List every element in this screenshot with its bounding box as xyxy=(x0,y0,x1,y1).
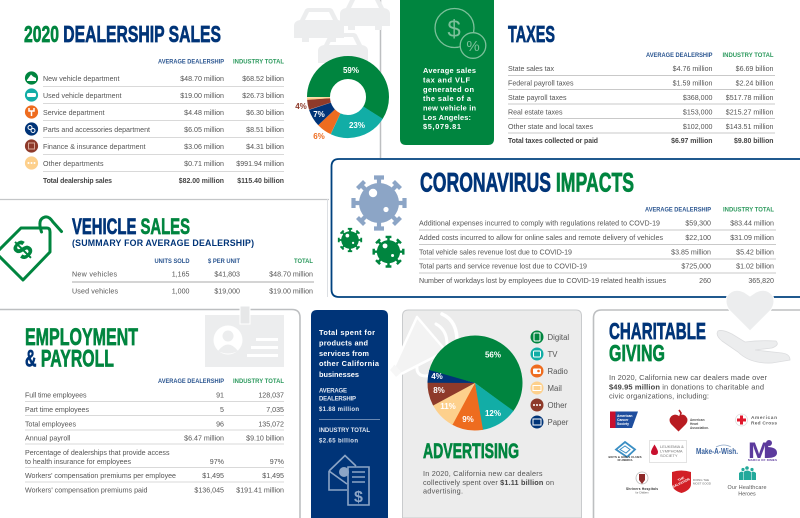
logo: American Cancer Society: American xyxy=(617,414,632,418)
logo: American Red Cross: American xyxy=(751,415,777,421)
logo: Leukemia and Lymphoma Society: SOCIETY xyxy=(660,453,678,458)
table: employment: $9.10 billion xyxy=(246,434,284,442)
table: coronavirus: $725,000 xyxy=(681,262,711,270)
table: taxes: $215.27 million xyxy=(726,108,774,116)
table: employment: 97% xyxy=(210,458,225,466)
table: taxes: Federal payroll taxes xyxy=(508,80,574,88)
table: dealership sales xyxy=(43,58,284,185)
table: employment: Full time employees xyxy=(25,392,87,400)
table: taxes xyxy=(508,52,775,145)
logo: Leukemia and Lymphoma Society: LYMPHOMA xyxy=(660,448,683,454)
table: dealership sales: $8.51 billion xyxy=(246,126,284,134)
logo: Leukemia and Lymphoma Society xyxy=(650,440,686,462)
table: taxes: $102,000 xyxy=(683,123,713,131)
text: spending: $2.65 billion xyxy=(319,438,358,444)
logo: Salvation Army: THE xyxy=(677,476,686,482)
legend: advertising: Radio xyxy=(548,367,569,376)
table: coronavirus: $83.44 million xyxy=(730,220,774,228)
table: coronavirus: Added costs incurred to allow for online sales and remote delivery of vehicles xyxy=(419,234,663,242)
table: employment: $191.41 million xyxy=(236,486,284,494)
table: dealership sales: $68.52 billion xyxy=(242,75,284,83)
subheading: (SUMMARY FOR AVERAGE DEALERSHIP) xyxy=(72,238,254,248)
logo: American Heart Association xyxy=(670,410,709,432)
logo: American Red Cross xyxy=(736,414,777,426)
table: coronavirus: Total vehicle sales revenue lost due to COVID-19 xyxy=(419,248,572,256)
icon: price tag: $ xyxy=(7,234,39,266)
table: employment xyxy=(25,378,285,494)
icon: id badge xyxy=(205,306,284,367)
logo: Boys and Girls Clubs xyxy=(608,442,642,462)
table: vehicle sales xyxy=(72,258,314,296)
table: employment: $1,495 xyxy=(262,472,284,480)
icon: small virus right xyxy=(374,237,403,266)
table: vehicle sales: Used vehicles xyxy=(72,288,118,296)
text: charitable: $49.95 million in donations to charitable and xyxy=(609,382,764,392)
table: employment: Workers' compensation premiums per employee xyxy=(25,472,176,480)
table: dealership sales: $6.05 million xyxy=(184,126,224,134)
text: advertising xyxy=(423,469,554,496)
heading: employment and payroll: EMPLOYMENT xyxy=(25,324,138,351)
text: spending: INDUSTRY TOTAL xyxy=(319,428,370,434)
icon: price tag xyxy=(0,217,62,280)
heading: coronavirus impacts: CORONAVIRUS IMPACTS xyxy=(420,168,634,198)
table: taxes: AVERAGE DEALERSHIP xyxy=(646,52,713,59)
table: taxes: INDUSTRY TOTAL xyxy=(722,52,774,59)
table: taxes: Real estate taxes xyxy=(508,108,563,116)
panel: coronavirus impacts xyxy=(332,159,800,297)
icons: department xyxy=(25,71,38,170)
logo: Leukemia and Lymphoma Society: LEUKEMIA & xyxy=(660,444,684,449)
table: vehicle sales: $ PER UNIT xyxy=(208,258,241,265)
heading: advertising: ADVERTISING xyxy=(423,439,519,463)
text: sales tax: $5,079.81 xyxy=(423,122,461,131)
logo: Boys and Girls Clubs: BOYS & GIRLS CLUBS xyxy=(608,455,642,459)
table: vehicle sales: New vehicles xyxy=(72,270,117,278)
logo: Make-A-Wish: Make-A-Wish. xyxy=(696,447,738,456)
heading: charitable giving: GIVING xyxy=(609,340,665,366)
chart: advertising pie: 9% xyxy=(462,415,474,424)
chart: advertising pie: 8% xyxy=(433,386,445,395)
table: vehicle sales: $19,000 xyxy=(214,288,240,296)
panel: advertising xyxy=(389,310,582,518)
logo: Shriners Hospitals xyxy=(626,472,658,494)
heading: charitable giving: CHARITABLE xyxy=(609,318,706,344)
logo: American Cancer Society: Society xyxy=(617,422,629,426)
heading: employment and payroll: & PAYROLL xyxy=(25,346,114,372)
table: coronavirus: AVERAGE DEALERSHIP xyxy=(645,206,711,214)
chart: sales donut: 23% xyxy=(349,121,365,130)
logo: American Cancer Society xyxy=(610,412,638,428)
chart: sales donut: 59% xyxy=(343,66,359,75)
text: advertising: In 2020, California new car dealers xyxy=(423,469,543,478)
table: dealership sales: New vehicle department xyxy=(43,75,120,83)
table: dealership sales: Service department xyxy=(43,109,105,117)
table: taxes: $517.78 million xyxy=(726,94,774,102)
icon: large virus xyxy=(354,178,404,228)
text: sales tax: new vehicle in xyxy=(423,104,476,112)
table: employment: 135,072 xyxy=(258,420,284,428)
table: dealership sales: $48.70 million xyxy=(180,75,224,83)
table: dealership sales: $19.00 million xyxy=(180,92,224,100)
panel: dealership sales xyxy=(0,0,390,200)
table: employment: Total employees xyxy=(25,420,76,428)
logo: American Heart Association: Heart xyxy=(690,422,699,426)
table: coronavirus xyxy=(419,206,776,285)
table: dealership sales: Parts and accessories department xyxy=(43,126,150,134)
table: taxes: $9.80 billion xyxy=(734,138,774,145)
table: employment: Part time employees xyxy=(25,406,89,414)
panel: vehicle sales xyxy=(0,199,328,297)
text: sales tax: Los Angeles: xyxy=(423,113,471,122)
logo: March of Dimes: MARCH OF DIMES xyxy=(748,458,777,462)
table: coronavirus: $59,300 xyxy=(685,220,711,228)
logo: Salvation Army: DOING THE xyxy=(693,478,709,482)
logo: March of Dimes xyxy=(748,438,777,463)
text: advertising: advertising. xyxy=(423,486,463,496)
table: employment: 5 xyxy=(220,406,224,414)
table: dealership sales: Used vehicle department xyxy=(43,92,122,100)
chart: advertising pie: 12% xyxy=(485,409,501,418)
legend: advertising: Mail xyxy=(548,384,562,393)
table: coronavirus: $3.85 million xyxy=(671,248,711,256)
icon: heart in hand xyxy=(717,290,790,363)
text: charitable xyxy=(609,373,768,400)
table: taxes: Total taxes collected or paid xyxy=(508,138,598,145)
logo: Make-A-Wish xyxy=(696,445,738,456)
chart: sales donut: 7% xyxy=(313,110,325,119)
table: taxes: $1.59 million xyxy=(673,80,713,88)
legend: advertising xyxy=(530,330,569,428)
text: sales tax: the sale of a xyxy=(423,94,472,103)
logo: March of Dimes: M xyxy=(748,438,770,463)
table: employment: $1,495 xyxy=(202,472,224,480)
text: spending: products and xyxy=(319,338,368,348)
text: sales tax: Average sales xyxy=(423,66,476,75)
icon: envelope and invoice: $ xyxy=(354,489,363,506)
table: vehicle sales: $48.70 million xyxy=(269,270,313,278)
table: dealership sales: Finance & insurance department xyxy=(43,143,146,151)
table: vehicle sales: $19.00 million xyxy=(269,288,313,296)
heading: 2020 dealership sales: 2020 DEALERSHIP SALES xyxy=(24,21,221,47)
legend: advertising: Digital xyxy=(548,333,569,342)
logo: Boys and Girls Clubs: OF AMERICA xyxy=(617,459,633,462)
icon: dollar and percent: $ xyxy=(447,16,461,43)
table: dealership sales: Other departments xyxy=(43,160,104,168)
logo: Our Healthcare Heroes: Heroes xyxy=(738,492,756,498)
text: spending xyxy=(319,328,380,444)
table: taxes: Other state and local taxes xyxy=(508,123,593,131)
table: coronavirus: INDUSTRY TOTAL xyxy=(723,206,774,214)
table: taxes: $368,000 xyxy=(683,94,713,102)
chart: advertising pie: 56% xyxy=(485,350,501,360)
table: employment: 7,035 xyxy=(266,406,284,414)
table: dealership sales: Total dealership sales xyxy=(43,178,112,185)
table: dealership sales: INDUSTRY TOTAL xyxy=(233,58,284,66)
table: vehicle sales: 1,165 xyxy=(172,270,190,278)
table: employment: to health insurance for employees xyxy=(25,458,131,466)
table: employment: 96 xyxy=(216,420,224,428)
table: coronavirus: $31.09 million xyxy=(730,234,774,242)
table: taxes: $6.97 million xyxy=(671,138,712,145)
chart: sales donut: 6% xyxy=(313,132,325,141)
icon: dollar and percent: % xyxy=(466,38,480,55)
table: employment: 91 xyxy=(216,392,224,400)
table: taxes: State payroll taxes xyxy=(508,94,567,102)
logo: Shriners Hospitals: Shriners Hospitals xyxy=(626,487,658,491)
logo: Our Healthcare Heroes xyxy=(728,466,766,498)
table: vehicle sales: UNITS SOLD xyxy=(154,258,190,265)
chart: sales donut: 4% xyxy=(295,102,307,111)
table: taxes: $2.24 billion xyxy=(736,80,774,88)
logo: Salvation Army: MOST GOOD xyxy=(693,482,711,486)
chart: advertising pie: 4% xyxy=(431,372,443,381)
chart: sales donut xyxy=(295,55,390,141)
chart: advertising pie: 11% xyxy=(440,402,456,411)
text: sales tax: generated on xyxy=(423,85,474,94)
table: coronavirus: $22,100 xyxy=(685,234,711,242)
logo: Our Healthcare Heroes: Our Healthcare xyxy=(728,485,766,491)
panel: employment and payroll xyxy=(0,306,300,518)
table: dealership sales: $3.06 million xyxy=(184,143,224,151)
table: taxes: $143.51 million xyxy=(726,123,774,131)
table: vehicle sales: $41,803 xyxy=(214,270,240,278)
icon: dollar and percent xyxy=(435,8,486,58)
chart: advertising pie xyxy=(431,350,508,424)
logo: American Heart Association: Association. xyxy=(690,426,709,430)
logo: Salvation Army xyxy=(672,470,711,493)
table: dealership sales: AVERAGE DEALERSHIP xyxy=(158,58,224,66)
panel: sales tax callout xyxy=(400,0,494,145)
table: coronavirus: $5.42 billion xyxy=(736,248,774,256)
logo: American Cancer Society: Cancer xyxy=(617,418,629,422)
table: coronavirus: 365,820 xyxy=(748,277,774,285)
text: charitable: In 2020, California new car dealers made over xyxy=(609,373,768,382)
table: employment: 128,037 xyxy=(258,392,284,400)
icon: small virus left xyxy=(339,229,361,251)
table: employment: AVERAGE DEALERSHIP xyxy=(158,378,224,385)
text: spending: businesses xyxy=(319,370,359,379)
table: coronavirus: 260 xyxy=(699,277,711,285)
table: employment: 97% xyxy=(270,458,285,466)
table: dealership sales: $991.94 million xyxy=(236,160,284,168)
logo: American Heart Association: American xyxy=(690,418,705,422)
table: coronavirus: Number of workdays lost by employees due to COVID-19 related health issues xyxy=(419,277,666,285)
heading: charitable giving xyxy=(609,318,706,366)
text: charitable: civic organizations, including: xyxy=(609,392,709,400)
text: spending: $1.88 million xyxy=(319,407,359,413)
heading: employment and payroll xyxy=(25,324,138,372)
table: employment: Annual payroll xyxy=(25,434,71,442)
logo: American Red Cross: Red Cross xyxy=(751,420,777,426)
legend: advertising: TV xyxy=(548,350,558,359)
text: advertising: collectively spent over $1.11 billion on xyxy=(423,478,554,487)
table: employment: $136,045 xyxy=(194,486,224,494)
table: taxes: $6.69 billion xyxy=(736,65,774,73)
table: coronavirus: $1.02 billion xyxy=(736,262,774,270)
table: employment: Workers' compensation premiums paid xyxy=(25,486,148,494)
table: dealership sales: $115.40 billion xyxy=(237,178,284,185)
table: employment: INDUSTRY TOTAL xyxy=(233,378,284,385)
text: spending: AVERAGE xyxy=(319,388,347,394)
panel: taxes xyxy=(508,21,775,145)
table: dealership sales: $0.71 million xyxy=(184,160,224,168)
table: employment: Percentage of dealerships that provide access xyxy=(25,449,170,457)
icon: cars xyxy=(294,0,390,67)
text: spending: DEALERSHIP xyxy=(319,396,356,402)
panel: charitable giving xyxy=(594,290,800,518)
table: coronavirus: Total parts and service revenue lost due to COVID-19 xyxy=(419,262,587,270)
text: spending: services from xyxy=(319,349,369,358)
icon: megaphone xyxy=(389,314,457,378)
text: spending: other California xyxy=(319,359,380,368)
table: taxes: $153,000 xyxy=(683,108,713,116)
table: coronavirus: Additional expenses incurred to comply with regulations related to COVD-19 xyxy=(419,220,660,228)
text: spending: Total spent for xyxy=(319,328,375,337)
logo: Salvation Army: SALVATION xyxy=(672,477,691,489)
panel: california business spending xyxy=(311,310,388,518)
legend: advertising: Other xyxy=(548,401,567,410)
table: dealership sales: $6.30 billion xyxy=(246,109,284,117)
table: dealership sales: $82.00 million xyxy=(179,178,224,185)
table: vehicle sales: 1,000 xyxy=(172,288,190,296)
logo: Shriners Hospitals: for Children xyxy=(636,492,649,494)
text: sales tax xyxy=(423,66,476,131)
heading: vehicle sales: VEHICLE SALES xyxy=(72,214,190,239)
table: dealership sales: $26.73 billion xyxy=(242,92,284,100)
table: employment: $6.47 million xyxy=(184,434,224,442)
icon: envelope and invoice xyxy=(329,456,369,506)
legend: advertising: Paper xyxy=(548,418,569,427)
table: taxes: State sales tax xyxy=(508,65,554,73)
table: dealership sales: $4.48 million xyxy=(184,109,224,117)
text: sales tax: tax and VLF xyxy=(423,76,470,84)
table: vehicle sales: TOTAL xyxy=(294,258,313,265)
table: dealership sales: $4.31 billion xyxy=(246,143,284,151)
heading: taxes: TAXES xyxy=(508,21,555,47)
table: taxes: $4.76 million xyxy=(673,65,713,73)
